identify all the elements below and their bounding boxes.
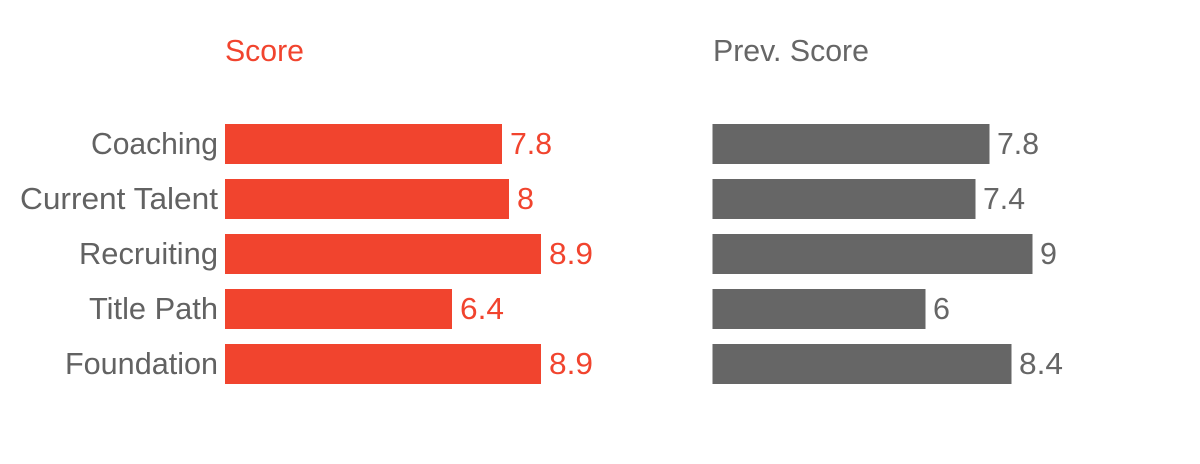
- values: previous score: 9: [1040, 237, 1057, 271]
- panel: category labels: Title Path: [89, 292, 218, 326]
- values: score: 8: [517, 182, 534, 216]
- values: score: 6.4: [460, 292, 504, 326]
- values: previous score: [933, 127, 1063, 381]
- values: score: [460, 127, 593, 381]
- panel: category labels: Current Talent: [20, 182, 219, 216]
- panel: category labels: Coaching: [91, 127, 218, 161]
- bars: previous score: [712, 124, 1032, 384]
- panel: previous score chart: [712, 34, 1063, 384]
- panel: category labels: Recruiting: [79, 237, 218, 271]
- values: previous score: 7.8: [997, 127, 1039, 161]
- values: score: 8.9: [549, 347, 593, 381]
- values: score: 7.8: [510, 127, 552, 161]
- heading: Prev. Score: Prev. Score: [713, 34, 869, 68]
- panel: score chart: [225, 34, 593, 384]
- values: previous score: 8.4: [1019, 347, 1063, 381]
- values: score: 8.9: [549, 237, 593, 271]
- panel: category labels: [20, 127, 219, 381]
- heading: Score: Score: [225, 34, 304, 68]
- values: previous score: 7.4: [983, 182, 1025, 216]
- panel: category labels: Foundation: [65, 347, 218, 381]
- bars: score: [225, 124, 541, 384]
- values: previous score: 6: [933, 292, 950, 326]
